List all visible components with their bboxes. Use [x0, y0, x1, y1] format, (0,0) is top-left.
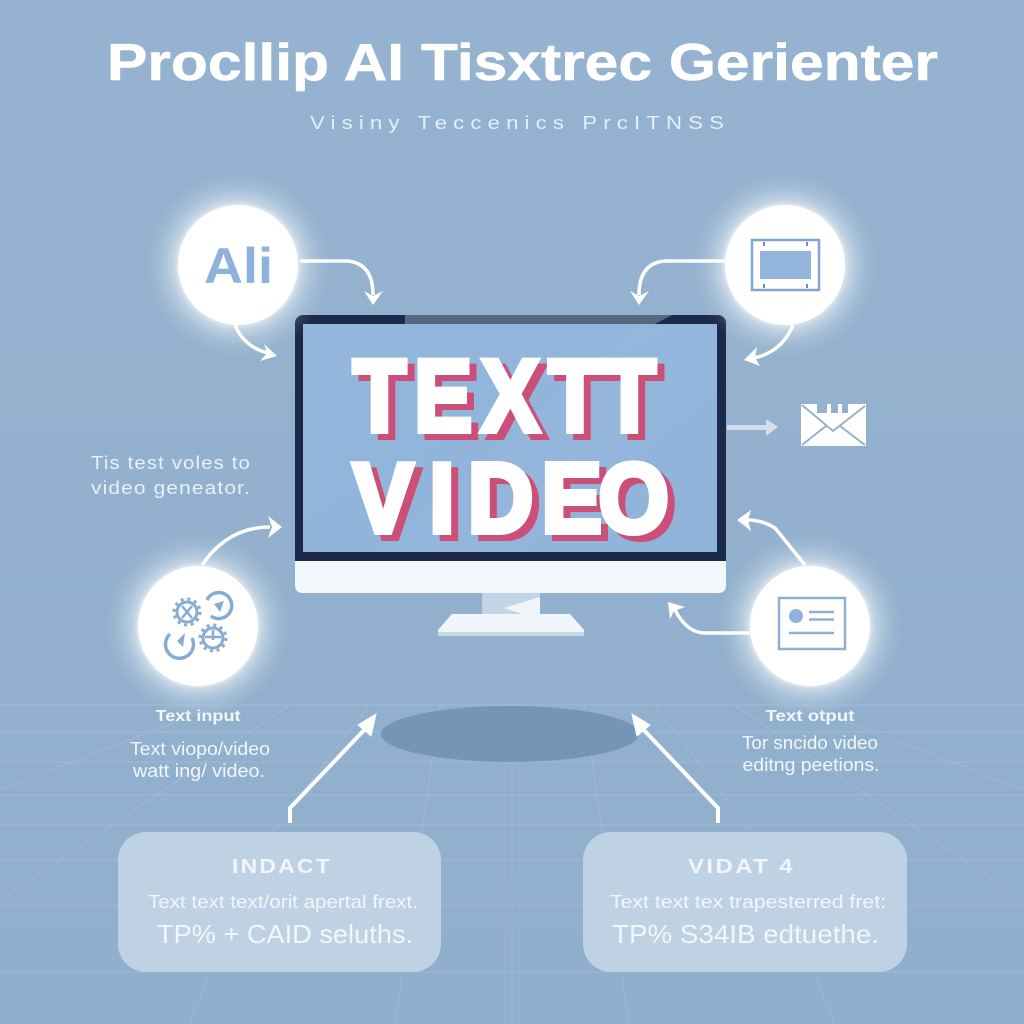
side text block: video geneator. — [91, 478, 251, 498]
side text block — [91, 453, 251, 498]
circle: screen icon — [693, 173, 877, 357]
title: Procllip AI Tisxtrec Gerienter — [107, 34, 938, 92]
label: text input: watt ing/ video. — [132, 761, 265, 781]
arrow: Ali to monitor side — [235, 325, 277, 361]
panel: INDACT: TP% + CAID seluths. — [157, 919, 413, 949]
arrow: monitor to envelope — [727, 419, 778, 436]
label: text output: Tor sncido video — [742, 733, 878, 753]
arrow: gears to monitor — [202, 516, 282, 565]
monitor stand — [438, 590, 584, 636]
arrow: card to monitor stand — [668, 602, 750, 633]
label: text output — [742, 708, 880, 775]
panel heading: INDACT — [232, 856, 332, 878]
label: text input: Text viopo/video — [130, 739, 270, 759]
circle: gears — [106, 534, 290, 718]
panel body: Text text tex trapesterred fret: — [610, 892, 886, 912]
screen headline: TEXTT: TEXTT — [353, 339, 656, 454]
monitor — [295, 315, 726, 636]
panel: VIDAT 4: TP% S34IB edtuethe. — [612, 919, 879, 949]
floor shadow ellipse — [381, 706, 639, 762]
panel: VIDAT 4 — [583, 832, 907, 972]
screen headline: VIDEO: VIDEO — [353, 444, 669, 553]
label: text input — [130, 708, 270, 781]
arrow: frame icon to monitor top — [630, 261, 725, 305]
arrow: left panel to ellipse — [290, 714, 376, 823]
icon: envelope — [801, 404, 866, 446]
screen headline: TEXTT shadow: TEXTT — [360, 345, 663, 460]
panel heading: VIDAT 4 — [688, 856, 795, 878]
icon: gears and dials — [165, 593, 232, 658]
arrow: frame icon to monitor side — [744, 325, 793, 366]
monitor chin — [295, 561, 726, 593]
panel body: Text text text/orit apertal frext. — [148, 892, 418, 912]
arrow: card to monitor side — [737, 510, 805, 565]
screen — [303, 324, 717, 552]
icon: profile card — [779, 598, 845, 649]
subtitle: Visiny Teccenics PrcITNSS — [310, 113, 730, 133]
side text block: Tis test voles to — [91, 453, 251, 473]
label: text output: editng peetions. — [742, 755, 880, 775]
icon: film frame — [752, 240, 819, 290]
circle: card icon — [718, 534, 902, 718]
arrow: right panel to ellipse — [632, 714, 718, 823]
screen headline: VIDEO shadow: VIDEO — [360, 450, 676, 559]
circle: Ali — [146, 173, 330, 357]
Ali label: Ali — [204, 238, 273, 294]
arrow: Ali to monitor top — [300, 261, 383, 305]
panel: INDACT — [118, 832, 441, 972]
label: text output: Text otput — [766, 708, 855, 725]
label: text input: Text input — [156, 708, 241, 725]
